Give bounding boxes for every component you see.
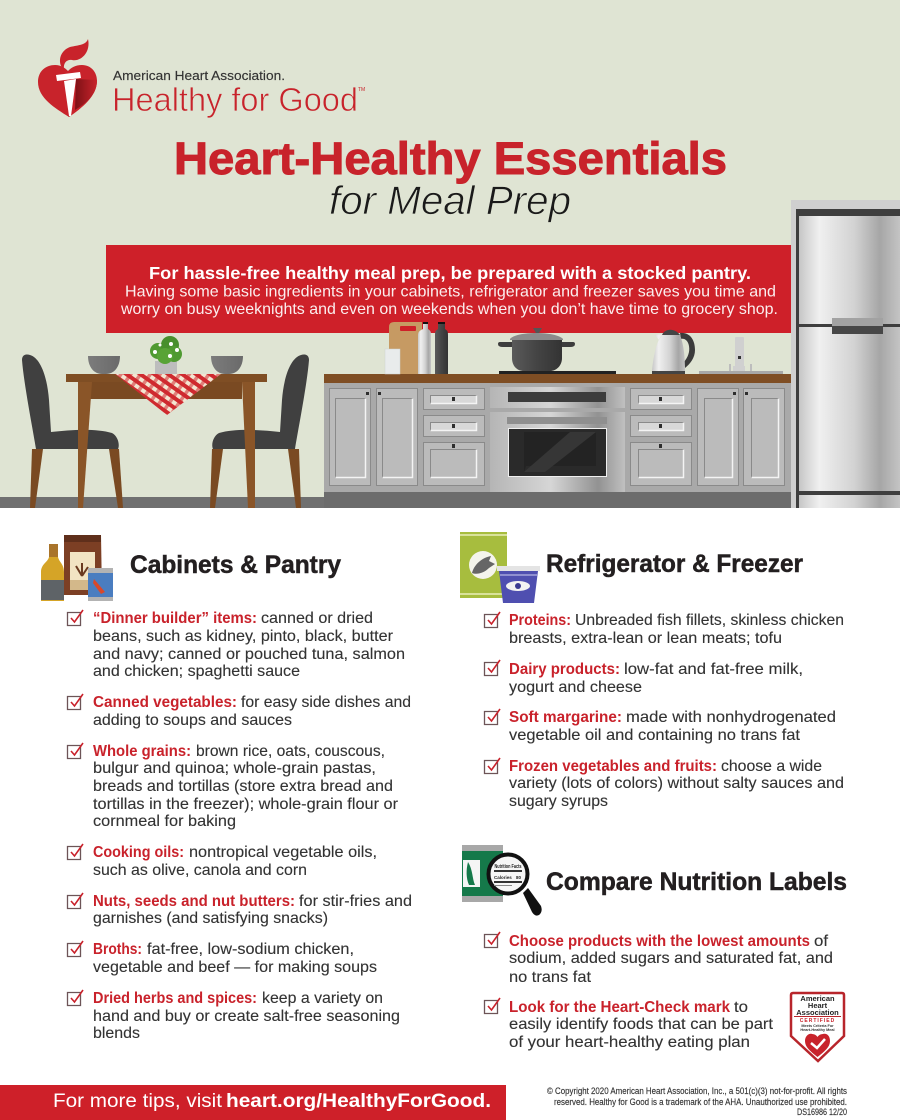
item text: sugary syrups <box>509 793 608 810</box>
icon: checkbox <box>68 990 83 1006</box>
counter top <box>324 374 791 383</box>
banner line 3: worry on busy weeknights and even on weekends when you don’t have time to grocery shop. <box>120 301 778 318</box>
item text: of your heart-healthy eating plan <box>509 1034 750 1051</box>
item text: breasts, extra-lean or lean meats; tofu <box>509 630 782 647</box>
item: proteins <box>484 612 844 647</box>
item text: Soft margarine: <box>509 709 622 726</box>
item: soft margarine <box>484 709 836 744</box>
item text: Look for the Heart-Check mark <box>509 999 730 1016</box>
icon: heart-check certified badge: Heart <box>808 1001 828 1010</box>
item text <box>509 999 774 1051</box>
icon: heart-check certified badge: Heart-Healthy Meal <box>800 1028 835 1032</box>
heading: Cabinets & Pantry <box>130 551 341 579</box>
item text <box>93 990 400 1042</box>
copyright text: © Copyright 2020 American Heart Association, Inc., a 501(c)(3) not-for-profit. All rights <box>547 1086 847 1096</box>
icon: heart-check certified badge <box>791 993 844 1061</box>
item text: Cooking oils: <box>93 844 184 861</box>
icon: checkbox <box>68 941 83 956</box>
panel: cabinets and pantry <box>41 535 412 1042</box>
item text: vegetable oil and containing no trans fat <box>509 727 801 744</box>
icon: checkbox <box>68 694 83 710</box>
icon: checkbox <box>68 844 83 860</box>
item text: Canned vegetables: <box>93 694 237 711</box>
item text: Whole grains: <box>93 743 191 760</box>
item: heart-check mark <box>484 998 774 1051</box>
item text: and chicken; spaghetti sauce <box>93 663 300 680</box>
silver bottle <box>418 322 431 374</box>
bowl left <box>88 356 120 374</box>
item text: choose a wide <box>721 758 822 775</box>
oven <box>490 387 625 492</box>
footer text <box>53 1091 491 1112</box>
footer bar <box>0 1085 506 1120</box>
item text: Choose products with the lowest amounts <box>509 933 810 950</box>
icon: checkbox <box>484 612 500 628</box>
icon: checkbox <box>68 743 83 758</box>
icon: can and magnifying glass: 80 <box>516 875 522 880</box>
item text: “Dinner builder” items: <box>93 610 257 627</box>
item text <box>93 694 411 729</box>
item text: vegetable and beef — for making soups <box>93 959 377 976</box>
item: dried herbs and spices <box>68 990 400 1042</box>
left chair <box>22 355 123 508</box>
banner line 2: Having some basic ingredients in your cabinets, refrigerator and freezer saves you time and <box>125 284 776 300</box>
item text: Proteins: <box>509 612 571 629</box>
copyright text <box>547 1086 847 1117</box>
item text: Unbreaded fish fillets, skinless chicken <box>575 612 844 629</box>
item: dinner builder <box>68 610 405 680</box>
item text: such as olive, canola and corn <box>93 862 307 879</box>
sink and faucet <box>699 337 783 374</box>
icon: can and magnifying glass: Nutrition Facts <box>494 864 522 870</box>
icon: frozen bag and yogurt <box>460 532 540 603</box>
item text: blends <box>93 1025 140 1042</box>
footer text: heart.org/HealthyForGood. <box>226 1091 491 1112</box>
heading: Compare Nutrition Labels <box>546 868 847 896</box>
item text: for easy side dishes and <box>241 694 411 711</box>
icon: checkbox <box>484 998 500 1014</box>
item text: cornmeal for baking <box>93 813 236 830</box>
refrigerator <box>791 200 900 508</box>
item text: adding to soups and sauces <box>93 712 292 729</box>
cabinet body <box>324 383 791 492</box>
item text: no trans fat <box>509 969 592 986</box>
item text: Broths: <box>93 941 142 958</box>
icon: checkbox <box>484 709 500 724</box>
item text <box>93 610 405 680</box>
copyright text: DS16986 12/20 <box>797 1107 847 1117</box>
icon: checkbox <box>68 893 83 908</box>
item: nuts and seeds <box>68 893 412 927</box>
item: broths <box>68 941 377 976</box>
item text: canned or dried <box>261 610 373 627</box>
item text: for stir-fries and <box>299 893 412 910</box>
item text: of <box>814 933 829 950</box>
kettle <box>652 330 695 374</box>
heading: Refrigerator & Freezer <box>546 550 803 578</box>
item text: keep a variety on <box>262 990 383 1007</box>
item text <box>93 743 399 830</box>
item text: Frozen vegetables and fruits: <box>509 758 717 775</box>
item text: garnishes (and satisfying snacks) <box>93 910 328 927</box>
right chair <box>210 355 309 508</box>
item text: and navy; canned or pouched tuna, salmon <box>93 646 405 663</box>
panel: refrigerator and freezer <box>460 532 844 810</box>
title: Heart-Healthy Essentials <box>174 133 727 184</box>
item text <box>93 844 377 879</box>
item text: to <box>734 999 748 1016</box>
wall background <box>0 0 900 508</box>
item text: breads and tortillas (store extra bread and <box>93 778 393 795</box>
item text: brown rice, oats, couscous, <box>196 743 385 760</box>
item text: yogurt and cheese <box>509 679 642 696</box>
dark bottle <box>435 322 448 374</box>
cabinet base <box>324 492 791 508</box>
item: whole grains <box>68 743 399 830</box>
item text <box>509 661 803 696</box>
copyright text: reserved. Healthy for Good is a trademark of the AHA. Unauthorized use prohibited. <box>554 1097 847 1107</box>
icon: checkbox <box>484 660 500 676</box>
item text: easily identify foods that can be part <box>509 1016 774 1033</box>
dining table <box>66 374 267 508</box>
icon: checkbox <box>68 610 83 626</box>
panel: compare nutrition labels <box>462 845 847 1061</box>
icon: heart-check certified badge: American <box>800 994 835 1003</box>
item: cooking oils <box>68 844 377 879</box>
item text <box>509 758 844 810</box>
logo: American Heart Association Healthy for Good <box>38 39 365 118</box>
brand name: Healthy for Good <box>112 81 358 118</box>
item text: nontropical vegetable oils, <box>189 844 377 861</box>
glass jar <box>385 349 400 374</box>
icon: checkbox <box>484 758 500 774</box>
item: choose products <box>484 932 833 986</box>
item text <box>93 941 377 976</box>
item text: variety (lots of colors) without salty sauces and <box>509 775 844 792</box>
icon: can and magnifying glass: Calories <box>494 875 512 880</box>
item: canned vegetables <box>68 694 411 729</box>
icon: can and magnifying glass <box>462 845 542 916</box>
item text: Dairy products: <box>509 661 620 678</box>
subtitle: for Meal Prep <box>329 179 571 223</box>
left cabinet knobs <box>366 392 455 448</box>
footer text: For more tips, visit <box>53 1091 223 1112</box>
item text: Dried herbs and spices: <box>93 990 257 1007</box>
right cabinet knobs <box>659 392 748 448</box>
item text: tortillas in the freezer); whole-grain flour or <box>93 796 399 813</box>
trademark: TM <box>358 87 365 93</box>
organization name: American Heart Association. <box>113 68 285 83</box>
icon: heart-check certified badge: Meets Criteria For <box>801 1024 834 1028</box>
cutting board <box>389 322 422 374</box>
cooking pot <box>498 328 616 374</box>
item text: sodium, added sugars and saturated fat, and <box>509 950 833 967</box>
icon: heart-check certified badge: Association <box>796 1008 839 1017</box>
item text: low-fat and fat-free milk, <box>624 661 803 678</box>
icon: pantry items <box>41 535 113 601</box>
floor <box>0 497 792 508</box>
item text <box>509 612 844 647</box>
item text: Nuts, seeds and nut butters: <box>93 893 295 910</box>
icon: heart and torch <box>38 39 97 117</box>
item text <box>509 709 836 744</box>
tablecloth <box>115 374 221 415</box>
potted plant <box>150 336 182 374</box>
item: dairy products <box>484 660 803 696</box>
item text: fat-free, low-sodium chicken, <box>147 941 354 958</box>
item text: bulgur and quinoa; whole-grain pastas, <box>93 760 376 777</box>
item text: beans, such as kidney, pinto, black, butter <box>93 628 394 645</box>
banner headline: For hassle-free healthy meal prep, be prepared with a stocked pantry. <box>149 263 751 283</box>
kitchen illustration <box>0 200 900 508</box>
item text <box>509 933 833 986</box>
icon: checkbox <box>484 932 500 948</box>
left cabinets <box>330 388 484 486</box>
item text: made with nonhydrogenated <box>626 709 836 726</box>
right cabinets <box>630 388 784 486</box>
item: frozen vegetables and fruits <box>484 758 844 810</box>
panel: intro banner <box>106 245 792 333</box>
item text: hand and buy or create salt-free seasoning <box>93 1008 400 1025</box>
bowl right <box>211 356 243 374</box>
icon: heart-check certified badge: CERTIFIED <box>800 1018 835 1024</box>
item text <box>93 893 412 927</box>
